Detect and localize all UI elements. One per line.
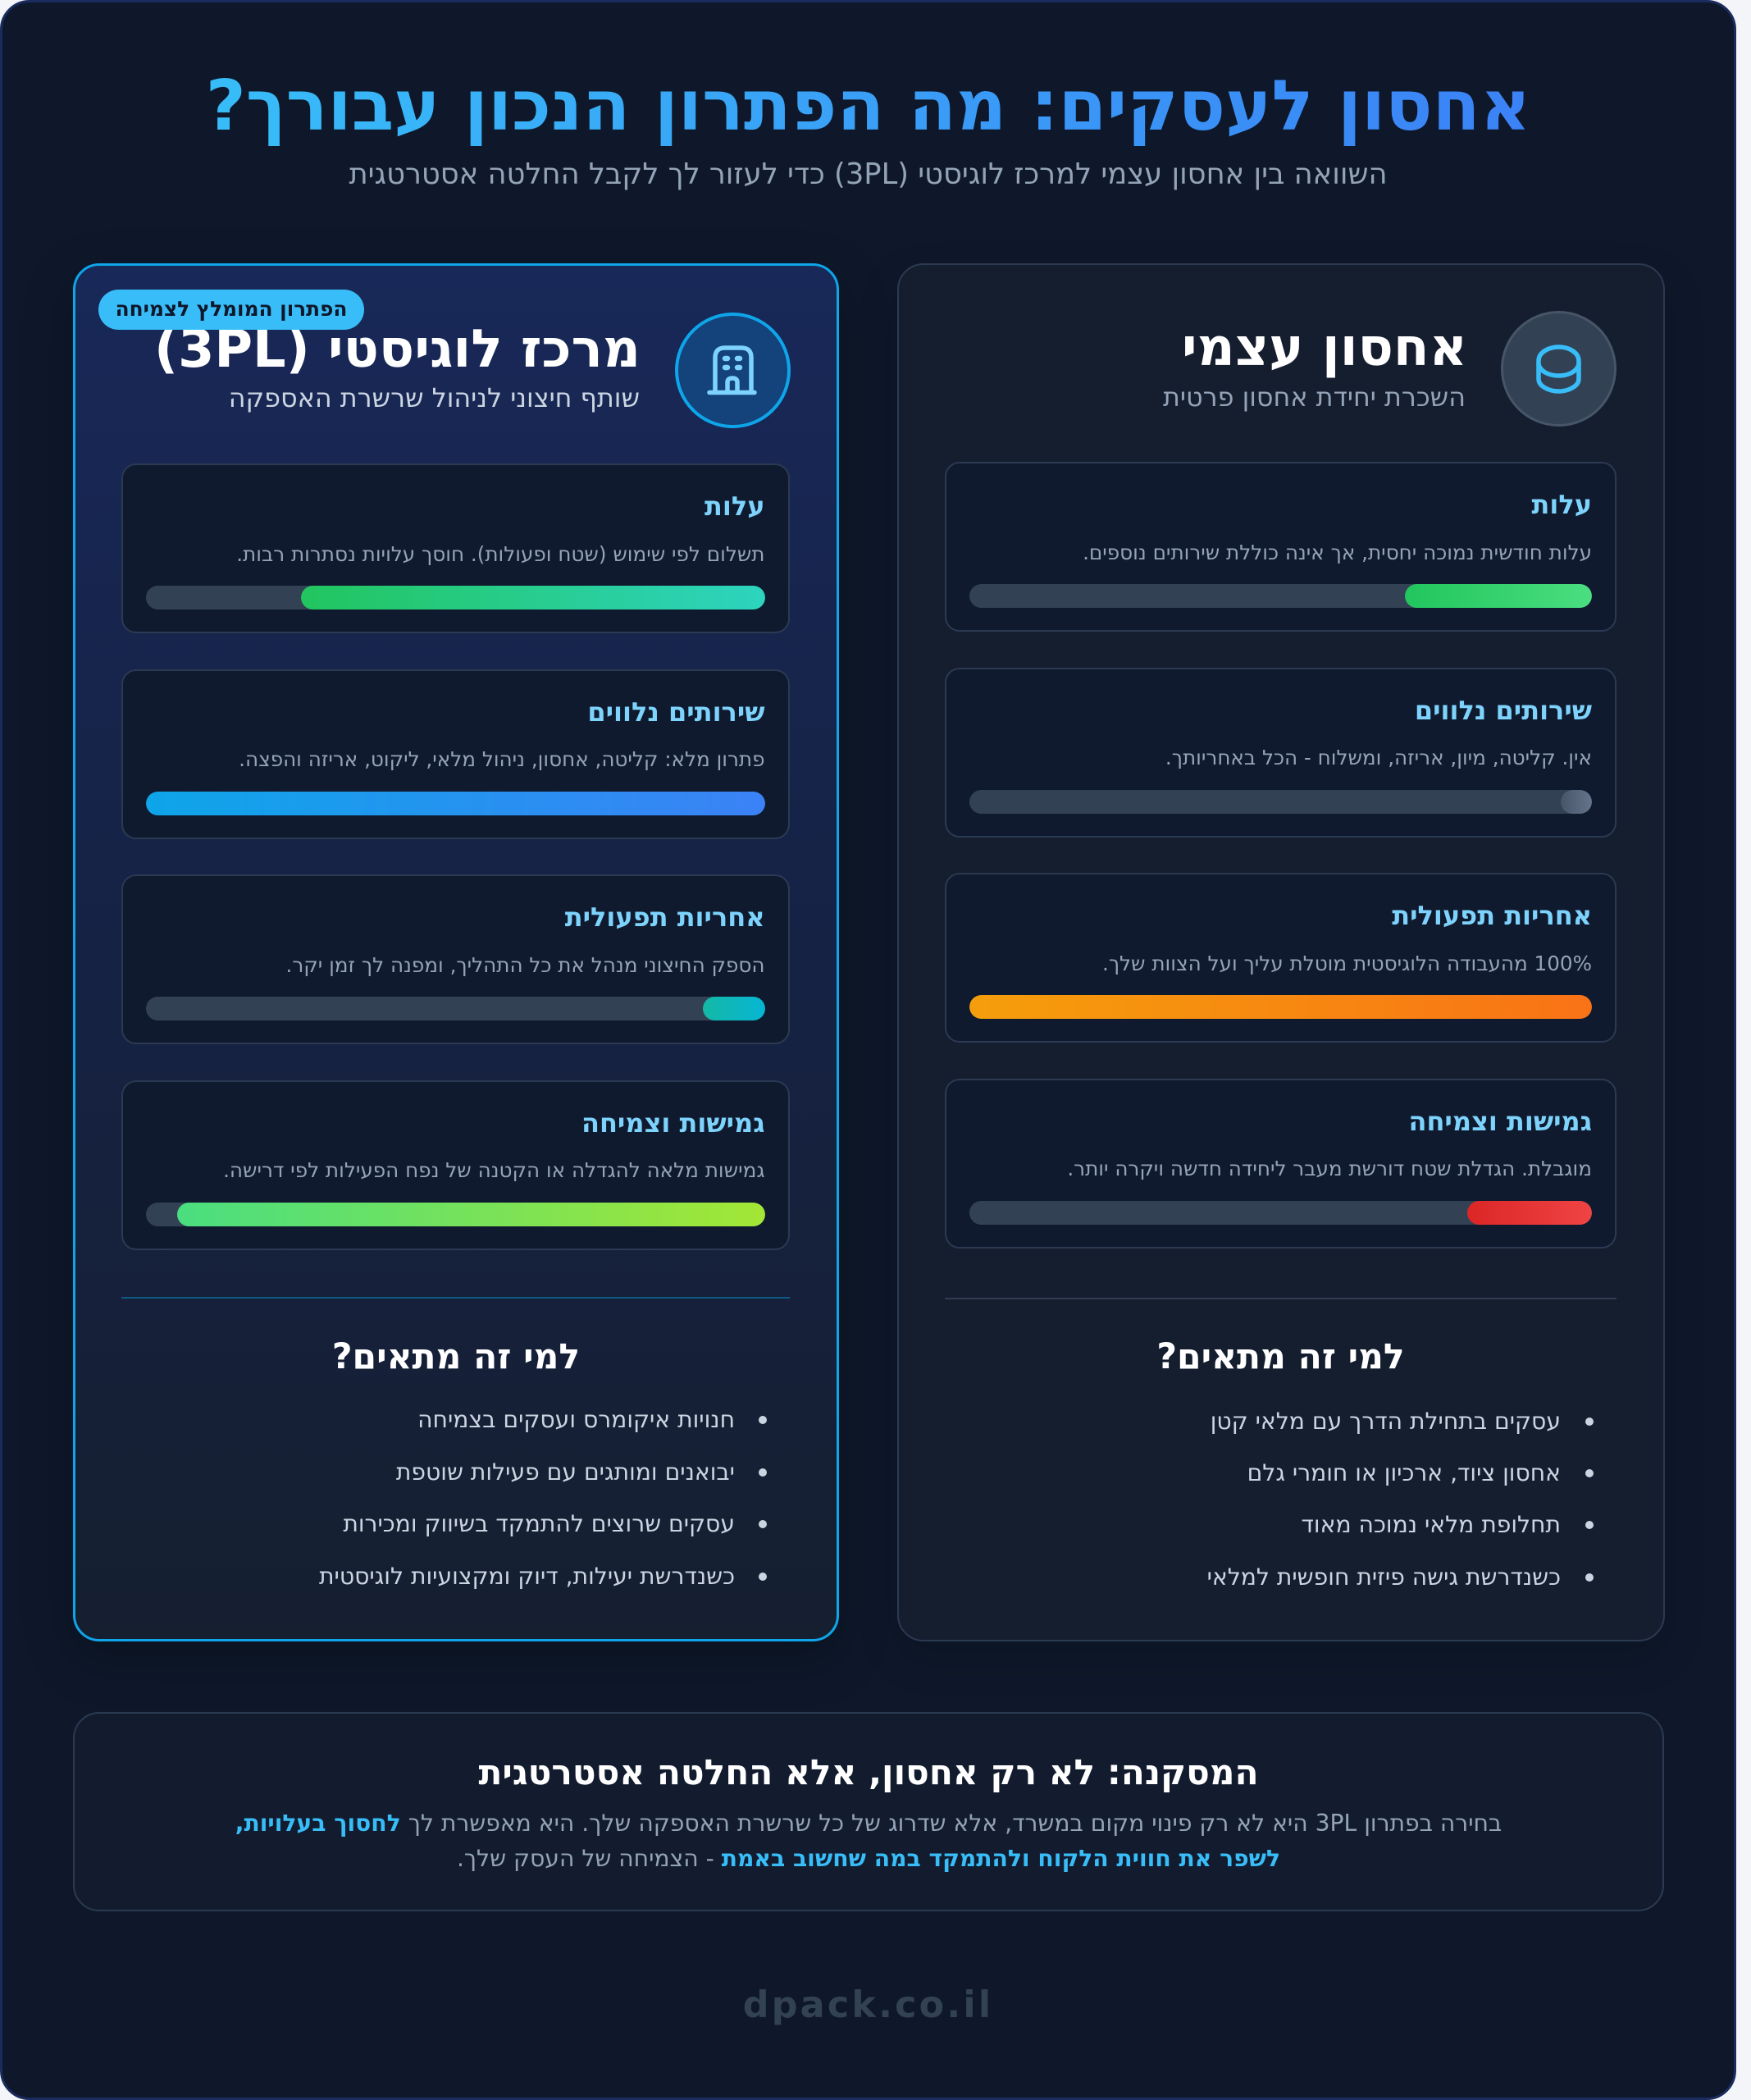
conclusion heading: המסקנה: לא רק אחסון, אלא החלטה אסטרטגית [478, 1752, 1259, 1792]
metric: 3PL flexibility: גמישות וצמיחה [581, 1107, 764, 1139]
metric: 3PL responsibility: הספק החיצוני מנהל את כל התהליך, ומפנה לך זמן יקר. [285, 953, 764, 976]
metric: self storage cost: עלות [1531, 489, 1592, 520]
title: אחסון לעסקים: מה הפתרון הנכון עבורך? [206, 65, 1530, 146]
metric: 3PL cost: עלות [705, 491, 764, 522]
heading: who fits 3PL: למי זה מתאים? [332, 1337, 580, 1376]
metric: 3PL responsibility [121, 874, 789, 1044]
list: 3PL audience [319, 1406, 767, 1590]
metric: 3PL services [121, 669, 789, 838]
panel heading: 3PL: מרכז לוגיסטי (3PL) [154, 319, 641, 380]
metric: self storage flexibility: מוגבלת. הגדלת שטח דורשת מעבר ליחידה חדשה ויקרה יותר. [1067, 1157, 1592, 1180]
metric: 3PL cost: תשלום לפי שימוש (שטח ופעולות). חוסך עלויות נסתרות רבות. [236, 541, 764, 566]
metric: 3PL responsibility: אחריות תפעולית [565, 902, 764, 933]
list: 3PL audience: חנויות איקומרס ועסקים בצמיחה [417, 1406, 735, 1433]
conclusion text: לשפר את חווית הלקוח ולהתמקד במה שחשוב באמת - הצמיחה של העסק שלך. [457, 1845, 1280, 1872]
recommended badge [98, 290, 364, 330]
metric: self storage cost [945, 462, 1616, 632]
metric: self storage services: שירותים נלווים [1415, 694, 1592, 725]
metric: 3PL services: פתרון מלא: קליטה, אחסון, ניהול מלאי, ליקוט, אריזה והפצה. [239, 747, 764, 771]
metric: self storage flexibility: גמישות וצמיחה [1408, 1106, 1592, 1137]
panel subheading: 3PL: שותף חיצוני לניהול שרשרת האספקה [229, 383, 640, 413]
list: self storage audience: אחסון ציוד, ארכיון או חומרי גלם [1247, 1459, 1561, 1486]
list: 3PL audience: כשנדרשת יעילות, דיוק ומקצועיות לוגיסטית [319, 1563, 735, 1590]
heading: who fits self storage: למי זה מתאים? [1156, 1337, 1405, 1377]
metric: self storage responsibility: אחריות תפעולית [1392, 900, 1592, 931]
list: self storage audience: כשנדרשת גישה פיזית חופשית למלאי [1207, 1564, 1561, 1591]
metric: 3PL flexibility: גמישות מלאה להגדלה או הקטנה של נפח הפעילות לפי דרישה. [223, 1158, 764, 1182]
metric: self storage cost: עלות חודשית נמוכה יחסית, אך אינה כוללת שירותים נוספים. [1083, 540, 1592, 564]
panel: self storage [897, 263, 1665, 1641]
list: self storage audience: תחלופת מלאי נמוכה מאוד [1302, 1511, 1561, 1538]
metric: 3PL cost [121, 463, 789, 633]
metric: self storage responsibility: 100% מהעבודה הלוגיסטית מוטלת עליך ועל הצוות שלך. [1102, 952, 1592, 975]
panel heading: self storage: אחסון עצמי [1182, 317, 1467, 378]
footer brand: dpack.co.il [743, 1984, 993, 2026]
conclusion text: בחירה בפתרון 3PL היא לא רק פינוי מקום במשרד, אלא שדרוג של כל שרשרת האספקה שלך. היא מאפשרת לך לחסוך בעלויות, [235, 1810, 1502, 1837]
metric: 3PL flexibility [121, 1080, 789, 1250]
metric: self storage flexibility [945, 1078, 1616, 1249]
panel subheading: self storage: השכרת יחידת אחסון פרטית [1163, 382, 1466, 413]
metric: 3PL services: שירותים נלווים [587, 696, 764, 727]
metric: self storage services [945, 668, 1616, 837]
list: 3PL audience: יבואנים ומותגים עם פעילות שוטפת [396, 1459, 735, 1486]
recommended badge: הפתרון המומלץ לצמיחה [116, 297, 347, 321]
metric: self storage responsibility [945, 873, 1616, 1043]
icon: self storage database [1501, 311, 1616, 427]
icon: 3PL building [674, 313, 791, 428]
panel: 3PL logistics center [73, 263, 839, 1641]
panel: conclusion [73, 1712, 1664, 1911]
list: self storage audience [1207, 1408, 1594, 1591]
subtitle: השוואה בין אחסון עצמי למרכז לוגיסטי (3PL) כדי לעזור לך לקבל החלטה אסטרטגית [349, 158, 1388, 191]
conclusion text [235, 1810, 1502, 1872]
metric: self storage services: אין. קליטה, מיון, אריזה, ומשלוח - הכל באחריותך. [1165, 746, 1592, 769]
list: 3PL audience: עסקים שרוצים להתמקד בשיווק ומכירות [343, 1510, 735, 1537]
list: self storage audience: עסקים בתחילת הדרך עם מלאי קטן [1211, 1408, 1561, 1435]
